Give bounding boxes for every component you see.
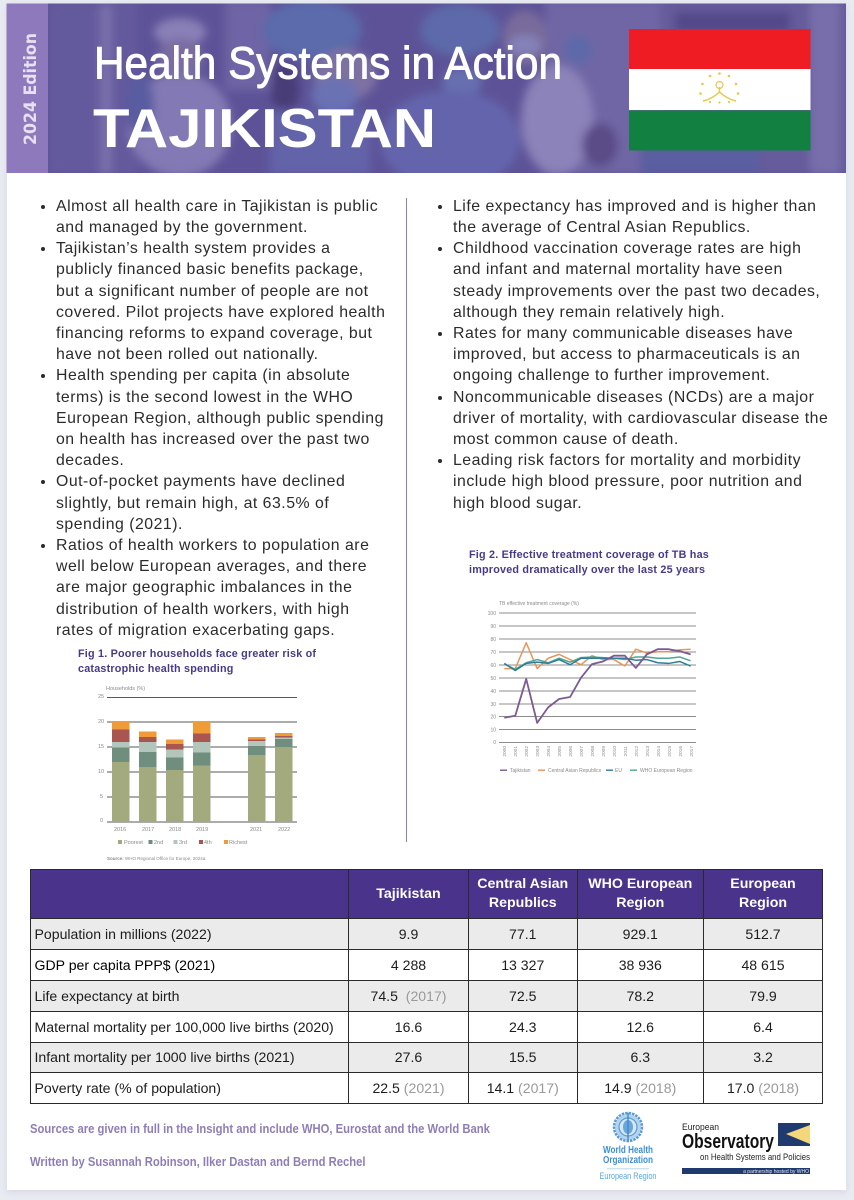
figure 2 line chart: WHO European Region (640, 768, 693, 774)
text block: left column bullets: terms) is the second lowest in the WHO (56, 389, 353, 406)
figure 2 line chart: 50 (490, 676, 496, 682)
comparison data table: 14.1 (2017) (487, 1080, 559, 1096)
background photo of medical staff (48, 4, 846, 173)
logo: World Health Organization: World Health (603, 1145, 653, 1156)
figure 2 line chart: 2008 (590, 746, 596, 757)
figure 2 line chart: 2017 (689, 746, 695, 757)
figure 2 line chart: 2011 (623, 746, 629, 756)
figure 2 line chart: 2014 (656, 746, 662, 757)
figure 1 stacked bar chart: 15 (98, 744, 104, 750)
text block: left column bullets: Ratios of health workers to population are (56, 537, 369, 554)
comparison data table: 17.0 (2018) (727, 1080, 799, 1096)
figure 1 stacked bar chart: 10 (98, 769, 104, 775)
figure 1 stacked bar chart: 2017 (142, 827, 154, 833)
comparison data table: Central Asian (477, 876, 568, 892)
text block: left column bullets: well below European averages, and there (56, 558, 367, 575)
comparison data table: Population in millions (2022) (34, 926, 212, 942)
comparison data table: Maternal mortality per 100,000 live births (2020) (34, 1018, 334, 1034)
figure 2 line chart: 2010 (612, 746, 618, 757)
comparison data table: 6.4 (753, 1018, 773, 1034)
figure 1 stacked bar chart: 2018 (169, 827, 181, 833)
figure 2 line chart: 2009 (601, 746, 607, 757)
logo: European Observatory: on Health Systems and Policies (700, 1152, 810, 1163)
figure 2 line chart: 60 (490, 663, 496, 669)
text block: right column bullets: Rates for many communicable diseases have (453, 325, 793, 342)
comparison data table: 3.2 (753, 1049, 773, 1065)
figure 1 stacked bar chart: Poorest (124, 840, 143, 846)
comparison data table: 14.9 (2018) (604, 1080, 676, 1096)
text block: left column bullets: decades. (56, 452, 124, 469)
text block: left column bullets: European Region, although public spending (56, 410, 384, 427)
sources note: Sources are given in full in the Insight and include WHO, Eurostat and the World Bank (30, 1122, 490, 1136)
figure 2 line chart: 2016 (678, 746, 684, 757)
figure 2 line chart: Central Asian Republics (548, 768, 602, 774)
figure 2 line chart: 2013 (645, 746, 651, 757)
figure 1 stacked bar chart: 2019 (196, 827, 208, 833)
figure 2 line chart: 10 (490, 728, 496, 734)
figure 2 line chart: 30 (490, 702, 496, 708)
text block: left column bullets: financing reforms to expand coverage, but (56, 325, 372, 342)
text block: right column bullets: Life expectancy has improved and is higher than (453, 198, 816, 215)
comparison data table: 79.9 (749, 988, 777, 1004)
text block: left column bullets: Out-of-pocket payments have declined (56, 473, 345, 490)
figure 1 title (78, 648, 316, 675)
text block: right column bullets: high blood sugar. (453, 495, 582, 512)
comparison data table: 9.9 (399, 926, 418, 942)
comparison data table: 38 936 (619, 957, 662, 973)
figure 2 line chart: EU (615, 768, 622, 774)
comparison data table: European (730, 876, 796, 892)
comparison data table: WHO European (588, 876, 692, 892)
figure 1 stacked bar chart: 0 (100, 818, 103, 824)
figure 1 stacked bar chart: 3rd (179, 840, 187, 846)
figure 1 stacked bar chart: 25 (98, 694, 104, 700)
text block: left column bullets: publicly financed basic benefits package, (56, 261, 364, 278)
logo: European Observatory (682, 1122, 810, 1175)
figure 1 stacked bar chart: Richest (229, 840, 248, 846)
comparison data table: Region (616, 895, 664, 911)
comparison data table (30, 869, 823, 1104)
text block: left column bullets: spending (2021). (56, 516, 183, 533)
text block: left column bullets: Health spending per capita (in absolute (56, 367, 350, 384)
text block: right column bullets: Leading risk factors for mortality and morbidity (453, 452, 801, 469)
text block: left column bullets: and managed by the government. (56, 219, 308, 236)
comparison data table: 15.5 (509, 1049, 536, 1065)
figure 2 line chart: 40 (490, 689, 496, 695)
figure 1 stacked bar chart: Households (%) (106, 686, 145, 692)
authors note: Written by Susannah Robinson, Ilker Dastan and Bernd Rechel (30, 1154, 365, 1168)
figure 1 title: catastrophic health spending (78, 663, 234, 675)
text block: left column bullets (41, 198, 385, 639)
edition strip (6, 4, 48, 173)
comparison data table: 512.7 (745, 926, 781, 942)
figure 1 stacked bar chart: 2016 (114, 827, 126, 833)
text block: right column bullets: Noncommunicable diseases (NCDs) are a major (453, 389, 814, 406)
text block: left column bullets: have not been rolled out nationally. (56, 346, 319, 363)
figure 2 title: improved dramatically over the last 25 years (469, 564, 705, 576)
comparison data table: Republics (489, 895, 557, 911)
comparison data table: 929.1 (623, 926, 658, 942)
figure 2 line chart: 80 (490, 637, 496, 643)
comparison data table: 6.3 (630, 1049, 650, 1065)
figure 2 line chart: 70 (490, 650, 496, 656)
edition strip: 2024 Edition (21, 33, 41, 145)
comparison data table: 22.5 (2021) (372, 1080, 445, 1096)
comparison data table: GDP per capita PPP$ (2021) (34, 957, 215, 973)
figure 2 line chart: 2015 (667, 746, 673, 757)
figure 2 line chart: 2000 (502, 746, 508, 757)
figure 2 line chart: 2004 (546, 746, 552, 757)
heading: Tajikistan: TAJIKISTAN (93, 97, 436, 159)
text block: left column bullets: rates of migration exacerbating gaps. (56, 622, 335, 639)
text block: left column bullets: distribution of health workers, with high (56, 601, 350, 618)
text block: left column bullets: slightly, but remain high, at 63.5% of (56, 495, 329, 512)
figure 2 line chart: Tajikistan (510, 768, 531, 774)
figure 1 stacked bar chart: 20 (98, 719, 104, 725)
text block: left column bullets: on health has increased over the past two (56, 431, 370, 448)
flag of Tajikistan (629, 29, 810, 150)
figure 1 stacked bar chart: 2nd (154, 840, 163, 846)
text block: left column bullets: Almost all health care in Tajikistan is public (56, 198, 378, 215)
figure 2 line chart: 2003 (535, 746, 541, 757)
figure 1 stacked bar chart: 5 (100, 794, 103, 800)
figure 2 line chart: 100 (488, 611, 496, 617)
comparison data table: 27.6 (395, 1049, 422, 1065)
figure 2 title: Fig 2. Effective treatment coverage of TB has (469, 549, 709, 561)
text block: left column bullets: Tajikistan’s health system provides a (56, 240, 330, 257)
figure 2 line chart: 2001 (513, 746, 519, 757)
text block: right column bullets: Childhood vaccination coverage rates are high (453, 240, 801, 257)
comparison data table: 24.3 (509, 1018, 536, 1034)
figure 1 stacked bar chart: Source: WHO Regional Office for Europe, 2024a. (107, 856, 206, 861)
text block: right column bullets: steady improvements over the past two decades, (453, 283, 820, 300)
comparison data table: Region (739, 895, 787, 911)
comparison data table: 13 327 (501, 957, 544, 973)
logo: European Observatory: European (682, 1122, 719, 1133)
figure 1 title: Fig 1. Poorer households face greater risk of (78, 648, 316, 660)
figure 1 stacked bar chart: 2021 (250, 827, 262, 833)
comparison data table: Infant mortality per 1000 live births (2021) (34, 1049, 295, 1065)
text block: left column bullets: covered. Pilot projects have explored health (56, 304, 385, 321)
figure 2 line chart: TB effective treatment coverage (%) (499, 601, 579, 607)
text block: right column bullets: ongoing challenge to further improvement. (453, 367, 770, 384)
figure 1 stacked bar chart: 4th (204, 840, 212, 846)
logo: European Observatory: a partnership hosted by WHO (743, 1169, 809, 1175)
comparison data table: Life expectancy at birth (34, 988, 179, 1004)
comparison data table: Poverty rate (% of population) (34, 1080, 221, 1096)
comparison data table: 74.5 (2017) (370, 988, 446, 1004)
text block: right column bullets: improved, but access to pharmaceuticals is an (453, 346, 800, 363)
text block: right column bullets: include high blood pressure, poor nutrition and (453, 473, 802, 490)
figure 2 line chart: 2012 (634, 746, 640, 757)
text block: right column bullets: most common cause of death. (453, 431, 679, 448)
text block: left column bullets: are major geographic imbalances in the (56, 579, 352, 596)
figure 2 line chart: 2002 (524, 746, 530, 757)
comparison data table: 48 615 (741, 957, 785, 973)
figure 2 title (469, 549, 709, 576)
comparison data table: 72.5 (509, 988, 536, 1004)
logo: European Observatory: Observatory (682, 1131, 775, 1153)
figure 2 line chart: 2007 (579, 746, 585, 757)
comparison data table: Tajikistan (376, 886, 441, 902)
figure 2 line chart: 2005 (557, 746, 563, 757)
comparison data table: 16.6 (395, 1018, 422, 1034)
comparison data table: 78.2 (627, 988, 654, 1004)
text block: right column bullets (438, 198, 828, 512)
figure 2 line chart: 90 (490, 624, 496, 630)
logo: World Health Organization: Organization (603, 1155, 653, 1166)
header banner (6, 4, 846, 173)
comparison data table: 4 288 (391, 957, 426, 973)
text block: left column bullets: but a significant number of people are not (56, 283, 369, 300)
logo: World Health Organization: European Region (600, 1171, 656, 1182)
figure 2 line chart: 0 (493, 740, 496, 746)
text block: right column bullets: and infant and maternal mortality have seen (453, 261, 783, 278)
figure 1 stacked bar chart: 2022 (278, 827, 290, 833)
text block: right column bullets: the average of Central Asian Republics. (453, 219, 751, 236)
figure 2 line chart: 2006 (568, 746, 574, 757)
comparison data table: 12.6 (627, 1018, 654, 1034)
text block: right column bullets: although they remain relatively high. (453, 304, 725, 321)
heading: Health Systems in Action: Health Systems in Action (94, 38, 562, 88)
text block: right column bullets: driver of mortality, with cardiovascular disease the (453, 410, 828, 427)
logo: World Health Organization (600, 1113, 656, 1182)
figure 2 line chart: 20 (490, 714, 496, 720)
comparison data table: 77.1 (509, 926, 536, 942)
